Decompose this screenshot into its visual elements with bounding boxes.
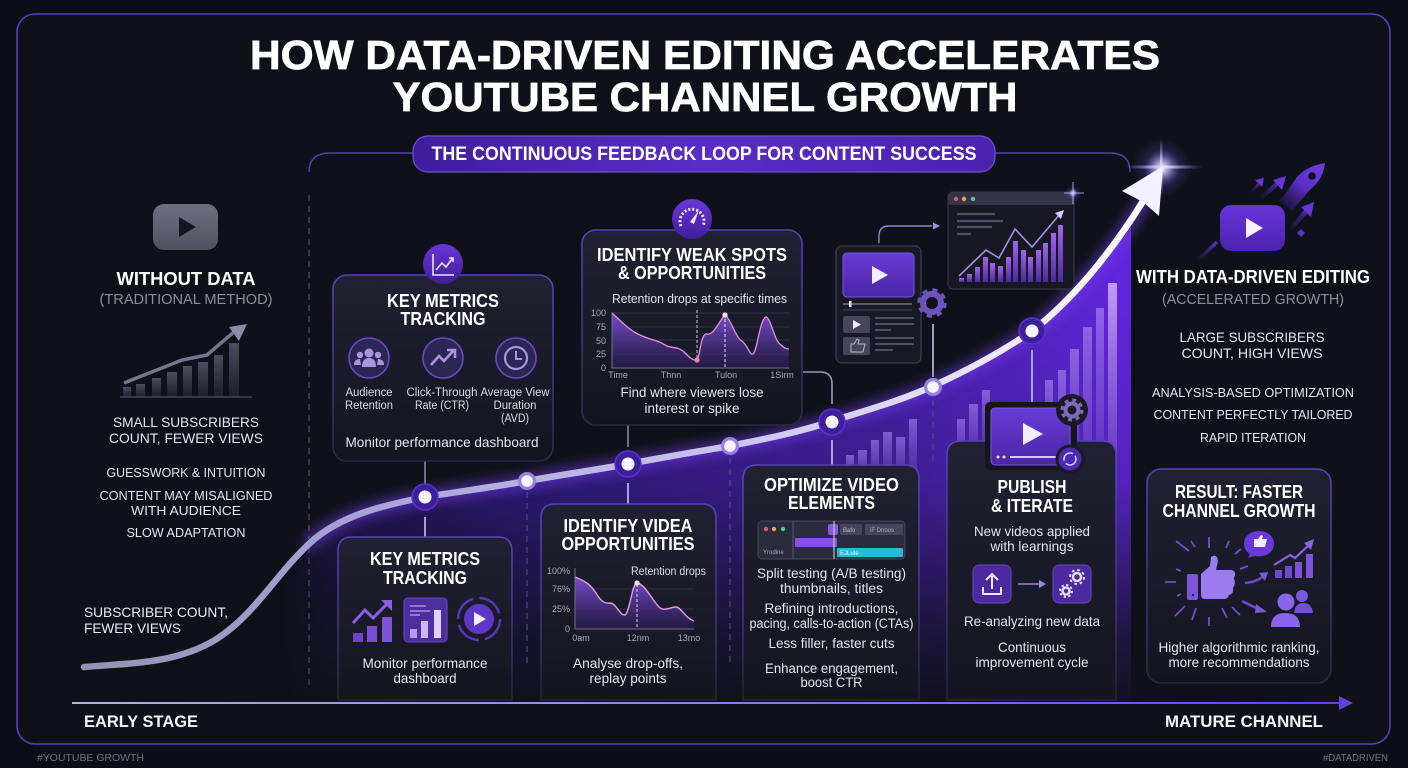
icon: growth chart: [1245, 539, 1314, 583]
panel: key metrics tracking lower: [338, 537, 512, 700]
caption: dashboard: [394, 670, 456, 686]
panel: result: [1147, 469, 1331, 683]
panel: identify video opportunities: [541, 504, 716, 700]
icon: grey video play: [153, 204, 218, 250]
chart: retention: 76%: [552, 584, 570, 594]
text: traits: ANALYSIS-BASED OPTIMIZATION: [1152, 385, 1354, 400]
hashtag left: #YOUTUBE GROWTH: [37, 752, 144, 764]
chart: retention: [547, 566, 706, 643]
chart: retention: 13mo: [678, 633, 700, 643]
metric: average view duration: [480, 338, 550, 425]
heading: without data: WITHOUT DATA: [116, 269, 256, 289]
icon: dashboard tile: [404, 598, 447, 642]
caption: [1158, 639, 1320, 670]
heading: [562, 516, 694, 554]
caption: replay points: [590, 670, 666, 686]
editor timeline mockup: Bafo: [843, 528, 856, 534]
heading: IDENTIFY VIDEA: [564, 516, 692, 536]
heading: KEY METRICS: [387, 291, 499, 311]
title: [250, 32, 1160, 120]
chart: retention drops: 25: [596, 349, 606, 359]
text block: optimizations: Refining introductions,: [764, 601, 898, 616]
heading: [991, 477, 1073, 516]
illustration: video thumbnail: [985, 394, 1088, 472]
chart: slow growth: [120, 324, 252, 397]
text: improvement cycle: [976, 654, 1089, 670]
heading: IDENTIFY WEAK SPOTS: [597, 245, 787, 265]
caption: Higher algorithmic ranking,: [1158, 639, 1320, 655]
heading: [370, 549, 480, 588]
metric: average view duration: Average View: [480, 387, 550, 399]
arrow: [1018, 580, 1046, 588]
arrow: editor to dashboard: [879, 222, 940, 243]
section pill: THE CONTINUOUS FEEDBACK LOOP FOR CONTENT SUCCESS: [432, 144, 976, 165]
title: YOUTUBE CHANNEL GROWTH: [392, 74, 1018, 120]
text: traits: WITH AUDIENCE: [131, 503, 241, 518]
metric: audience retention: Audience: [346, 387, 392, 399]
text: New videos applied: [974, 523, 1090, 539]
heading: ELEMENTS: [788, 493, 875, 513]
text: traits: [100, 465, 272, 540]
heading: OPPORTUNITIES: [562, 534, 694, 554]
chart: retention: 0am: [572, 633, 590, 643]
curve start label: SUBSCRIBER COUNT,: [84, 604, 228, 620]
heading: TRACKING: [383, 568, 467, 588]
chart: retention drops: 0: [601, 363, 606, 373]
left dashed divider: [308, 195, 310, 690]
curve start label: [84, 604, 228, 636]
panel: identify weak spots: [582, 199, 802, 425]
text block: optimizations: Enhance engagement,: [765, 661, 898, 676]
panel: optimize video elements: [743, 465, 919, 700]
chart: retention drops: [591, 308, 794, 380]
editor timeline mockup: EJLute: [840, 551, 859, 557]
text block: optimizations: boost CTR: [800, 675, 863, 690]
editor timeline mockup: Yrodine: [763, 550, 784, 556]
subheading: (ACCELERATED GROWTH): [1162, 291, 1344, 308]
dashed timeline markers: [527, 400, 933, 665]
caption: [620, 384, 764, 416]
caption: Monitor performance dashboard: [346, 434, 538, 450]
chart: retention: 12nm: [627, 633, 649, 643]
chart: retention: 25%: [552, 604, 570, 614]
heading: WITH DATA-DRIVEN EDITING: [1136, 267, 1370, 287]
chart: retention drops: Thnn: [661, 370, 681, 380]
caption: Analyse drop-offs,: [573, 655, 683, 671]
metric: click-through rate: Click-Through: [406, 387, 478, 399]
icon: gears tile: [1053, 565, 1091, 603]
connector lines: [425, 324, 1032, 537]
axis label: mature channel: MATURE CHANNEL: [1165, 712, 1323, 731]
chart label: Retention drops at specific times: [612, 292, 787, 306]
curve nodes: [412, 318, 1045, 510]
panel: without data: [100, 204, 272, 540]
section pill: [413, 136, 995, 172]
icon: thumbs up with rays: [1165, 537, 1248, 626]
metric: audience retention: [345, 338, 393, 412]
caption: [573, 655, 683, 686]
axis label: early stage: EARLY STAGE: [84, 712, 198, 731]
chart: retention drops: Time: [608, 370, 628, 380]
text: [974, 523, 1090, 554]
icon: audience: [1242, 590, 1313, 627]
icon: gear: [919, 290, 945, 316]
heading: [387, 291, 499, 329]
chart: retention drops: 1Sirm: [770, 370, 794, 380]
chart: retention: Retention drops: [631, 566, 706, 578]
text: with learnings: [990, 538, 1074, 554]
icon: upload tile: [973, 565, 1011, 603]
metric: click-through rate: Rate (CTR): [415, 400, 469, 412]
curve start label: FEWER VIEWS: [84, 620, 181, 636]
icon: like bubble: [1244, 531, 1274, 558]
metric: average view duration: Duration: [494, 400, 536, 412]
metric: average view duration: (AVD): [501, 413, 529, 425]
icon: rising bars: [353, 600, 392, 642]
heading: TRACKING: [400, 309, 486, 329]
text: outcome: SMALL SUBSCRIBERS: [113, 414, 259, 430]
heading: CHANNEL GROWTH: [1162, 501, 1316, 521]
chart: retention: 0: [565, 624, 570, 634]
text block: optimizations: thumbnails, titles: [780, 581, 883, 596]
illustration: analytics dashboard: [948, 182, 1084, 289]
text: traits: CONTENT MAY MISALIGNED: [100, 488, 272, 503]
text: outcome: COUNT, HIGH VIEWS: [1182, 345, 1322, 361]
heading: [597, 245, 787, 283]
caption: [362, 655, 488, 686]
chart: retention: 100%: [547, 566, 570, 576]
chart: retention drops: 100: [591, 308, 606, 318]
editor timeline mockup: iF Dnoos: [870, 528, 894, 534]
growth bars: [846, 308, 1104, 469]
heading: KEY METRICS: [370, 549, 480, 569]
text: outcome: [109, 414, 263, 446]
text: outcome: [1180, 329, 1324, 361]
text block: optimizations: pacing, calls-to-action (CTAs): [750, 616, 914, 631]
caption: Monitor performance: [362, 655, 488, 671]
curve arrow head with flare: [1122, 138, 1203, 216]
icon: purple video with rocket: [1198, 163, 1325, 260]
text: Continuous: [998, 639, 1066, 655]
title: HOW DATA-DRIVEN EDITING ACCELERATES: [250, 32, 1160, 78]
heading: OPTIMIZE VIDEO: [764, 475, 899, 495]
text: outcome: COUNT, FEWER VIEWS: [109, 430, 263, 446]
panel: with data-driven editing: [1136, 163, 1370, 445]
illustration: video editor panel: [836, 246, 921, 363]
text: traits: CONTENT PERFECTLY TAILORED: [1154, 407, 1352, 422]
tallest bar: [1108, 283, 1117, 484]
panel: key metrics tracking upper: [333, 244, 553, 461]
hashtag right: #DATADRIVEN: [1323, 752, 1388, 764]
text: outcome: LARGE SUBSCRIBERS: [1180, 329, 1324, 345]
text block: optimizations: Split testing (A/B testing): [757, 566, 906, 581]
text block: optimizations: Less filler, faster cuts: [768, 636, 895, 651]
time axis arrow: [72, 696, 1353, 710]
icon: gauge badge: [672, 199, 712, 239]
text: traits: [1152, 385, 1354, 445]
panel: publish and iterate: [947, 394, 1116, 700]
caption: interest or spike: [644, 400, 740, 416]
editor timeline mockup: [758, 521, 905, 559]
heading: PUBLISH: [998, 477, 1066, 497]
heading: RESULT: FASTER: [1175, 482, 1303, 502]
growth curve: [84, 198, 1145, 667]
text: Re-analyzing new data: [964, 613, 1100, 629]
subheading: traditional method: (TRADITIONAL METHOD): [100, 291, 272, 308]
text block: optimizations: [750, 566, 914, 690]
icon: line chart badge: [423, 244, 463, 284]
heading: & OPPORTUNITIES: [618, 263, 766, 283]
heading: & ITERATE: [991, 496, 1073, 516]
heading: [1162, 482, 1316, 521]
chart: retention drops: 75: [596, 322, 606, 332]
text: traits: GUESSWORK & INTUITION: [106, 465, 266, 480]
chart: retention drops: Tulon: [715, 370, 737, 380]
caption: more recommendations: [1168, 654, 1310, 670]
caption: Find where viewers lose: [620, 384, 764, 400]
feedback loop bracket: [309, 153, 1130, 172]
metric: click-through rate: [406, 338, 478, 412]
icon: play ring: [458, 598, 500, 640]
text: traits: SLOW ADAPTATION: [126, 525, 246, 540]
metric: audience retention: Retention: [345, 400, 393, 412]
text: [964, 613, 1100, 670]
text: traits: RAPID ITERATION: [1200, 430, 1306, 445]
heading: [764, 475, 899, 513]
chart: retention drops: 50: [596, 336, 606, 346]
growth area under curve: [280, 226, 1131, 700]
